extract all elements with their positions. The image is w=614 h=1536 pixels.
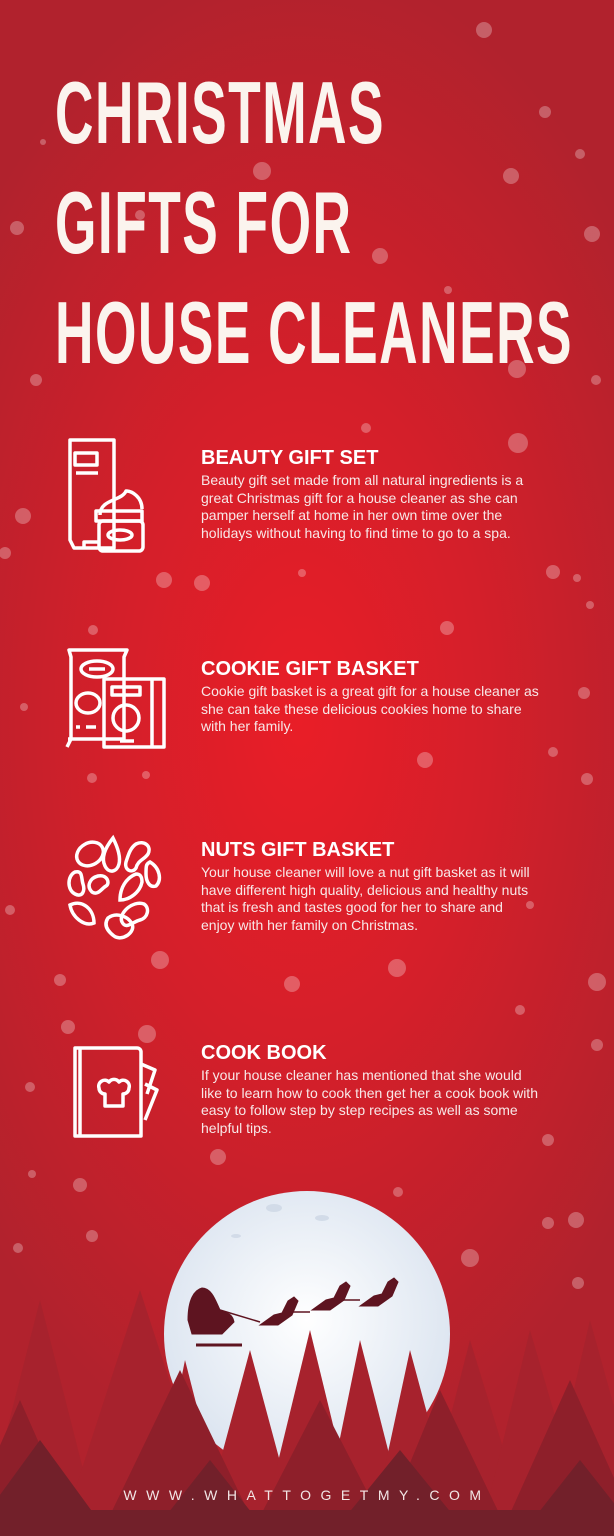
section: cookie gift basket: with her family. [201,718,293,734]
sleigh and reindeer [188,1278,398,1345]
title: GIFTS FOR [55,175,352,273]
section: cookie gift basket: Cookie gift basket is a great gift for a house cleaner as [201,683,539,699]
title [55,65,573,383]
section: beauty gift set [201,447,524,541]
scene: moon, sleigh, trees [0,1191,614,1536]
section: cook book: easy to follow step by step recipes as well as some [201,1102,518,1118]
section: cookie gift basket [201,658,539,734]
section: cook book: If your house cleaner has mentioned that she would [201,1067,522,1083]
trees back [0,1290,614,1536]
section: nuts gift basket: have different high quality, delicious and healthy nuts [201,882,528,898]
trees front [0,1440,614,1536]
section: beauty gift set: pamper herself at home in her own time over the [201,507,502,523]
footer url: WWW.WHATTOGETMY.COM [123,1487,491,1503]
section: nuts gift basket: that is fresh and tastes good for her to share and [201,899,503,915]
icon: beauty set [68,438,145,553]
section: beauty gift set: great Christmas gift for a house cleaner as she can [201,490,518,506]
section: nuts gift basket: Your house cleaner will love a nut gift basket as it will [201,864,530,880]
section: nuts gift basket: NUTS GIFT BASKET [201,839,394,861]
section: nuts gift basket: enjoy with her family on Christmas. [201,917,418,933]
title: HOUSE CLEANERS [55,285,573,383]
section: cookie gift basket: COOKIE GIFT BASKET [201,658,419,680]
section: beauty gift set: holidays without having to find time to go to a spa. [201,525,511,541]
title: CHRISTMAS [55,65,385,163]
icon: cook book [73,1046,159,1138]
section: cook book [201,1042,538,1136]
section: beauty gift set: Beauty gift set made from all natural ingredients is a [201,472,523,488]
section: cook book: COOK BOOK [201,1042,327,1064]
section: cookie gift basket: she can take these delicious cookies home to share [201,701,522,717]
section: cook book: helpful tips. [201,1120,272,1136]
section: nuts gift basket [201,839,530,933]
section: cook book: like to learn how to cook then get her a cook book with [201,1085,538,1101]
icon: cookie basket [66,648,166,749]
moon [164,1191,450,1477]
section: beauty gift set: BEAUTY GIFT SET [201,447,378,469]
trees mid [0,1370,614,1536]
icon: nuts [67,834,162,940]
